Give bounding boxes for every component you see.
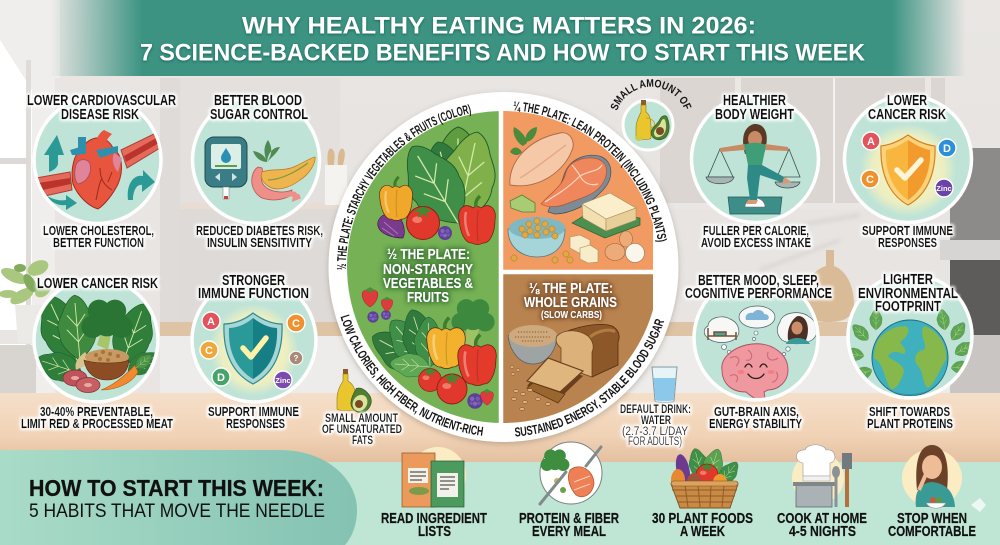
label: 30 PLANT FOODS	[652, 510, 753, 527]
icon: heart with arteries	[36, 130, 160, 210]
icon: orange shield with vitamins: C	[866, 174, 874, 186]
grains label: (SLOW CARBS)	[541, 309, 602, 321]
divider strokes	[501, 100, 665, 434]
caption: GUT-BRAIN AXIS,	[714, 405, 799, 419]
caption	[701, 224, 811, 250]
label	[777, 510, 867, 540]
heading: FOOTPRINT	[875, 299, 941, 315]
label	[519, 510, 619, 540]
ring text	[337, 101, 668, 436]
panel: lower cardiovascular disease risk	[27, 93, 176, 250]
heading: BETTER MOOD, SLEEP,	[698, 273, 819, 289]
caption: BETTER FUNCTION	[53, 236, 144, 250]
caption: INSULIN SENSITIVITY	[207, 236, 313, 250]
heading: LIGHTER	[883, 272, 933, 288]
callout: small amount of unsaturated fats	[322, 369, 402, 447]
panel: how to start this week	[0, 442, 1000, 545]
title	[140, 12, 866, 66]
label: PROTEIN & FIBER	[519, 510, 619, 527]
heading: BETTER BLOOD	[214, 93, 302, 109]
caption: SUPPORT IMMUNE	[862, 224, 953, 238]
caption: LOWER CHOLESTEROL,	[43, 224, 154, 238]
grains label	[524, 280, 617, 321]
label: DEFAULT DRINK:	[620, 404, 691, 416]
icon: greens, bowl, carrot and meat	[38, 294, 155, 393]
ring text: ½ THE PLATE: STARCHY VEGETABLES & FRUITS (COLOR)	[337, 104, 471, 270]
ring text: ¼ THE PLATE: LEAN PROTEIN (INCLUDING PLANTS)	[514, 101, 668, 242]
icon: teal shield with vitamins: Zinc	[275, 376, 291, 385]
half plate label: ½ THE PLATE:	[387, 246, 470, 263]
ring text: LOW CALORIES, HIGH FIBER, NUTRIENT-RICH	[340, 314, 484, 436]
caption: RESPONSES	[878, 236, 937, 250]
icon: oil bottle and avocado	[635, 100, 669, 141]
plate segments and foods	[340, 105, 653, 434]
icon: orange shield with vitamins: A	[867, 136, 875, 148]
label	[888, 510, 976, 540]
icon: teal shield with vitamins: A	[207, 316, 215, 328]
label: 4-5 NIGHTS	[789, 523, 856, 540]
heading	[685, 273, 832, 302]
label	[620, 404, 691, 448]
segment: quarter plate lean protein	[503, 105, 653, 270]
icon: earth with leaves	[851, 309, 970, 396]
icon: teal shield with vitamins	[200, 304, 305, 396]
label: READ INGREDIENT	[381, 510, 487, 527]
habit: protein and fiber every meal	[519, 442, 619, 540]
heading: SUGAR CONTROL	[210, 107, 308, 123]
title: 7 SCIENCE-BACKED BENEFITS AND HOW TO START THIS WEEK	[140, 40, 866, 66]
caption: ENERGY STABILITY	[709, 417, 803, 431]
caption: RESPONSES	[226, 417, 285, 431]
callout: small amount of oil (top)	[610, 79, 692, 152]
heading: LOWER CANCER RISK	[37, 276, 158, 292]
label: (2.7-3.7 L/DAY	[622, 426, 688, 438]
caption	[43, 224, 154, 250]
icon: orange shield with vitamins: Zinc	[936, 184, 952, 193]
icon: person balancing on scale	[706, 124, 800, 214]
caption	[709, 405, 803, 431]
heading	[715, 93, 794, 123]
label: EVERY MEAL	[532, 523, 606, 540]
panel: lighter environmental footprint	[842, 272, 976, 431]
habit: 30 plant foods a week	[652, 446, 753, 540]
caption	[196, 224, 323, 250]
heading: ENVIRONMENTAL	[858, 286, 958, 302]
icon: glass of water	[652, 367, 677, 402]
label: COOK AT HOME	[777, 510, 867, 527]
panel: stronger immune function	[192, 273, 316, 431]
heading: LOWER CARDIOVASCULAR	[27, 93, 176, 109]
icon: oil bottle and avocado	[337, 369, 376, 416]
label	[652, 510, 753, 540]
panel: better blood sugar control	[192, 93, 323, 250]
label: LISTS	[418, 523, 451, 540]
caption: AVOID EXCESS INTAKE	[701, 236, 811, 250]
label: FOR ADULTS)	[628, 436, 682, 448]
half plate label	[383, 246, 473, 306]
label: OF UNSATURATED	[322, 424, 402, 436]
banner text: HOW TO START THIS WEEK:	[29, 475, 324, 501]
icon: orange shield with vitamins: D	[943, 143, 951, 155]
icon: vegetable basket	[671, 446, 743, 508]
icon: glucose meter and pancreas	[205, 137, 315, 200]
label: A WEEK	[680, 523, 725, 540]
caption: LIMIT RED & PROCESSED MEAT	[21, 417, 173, 431]
icon: woman eating	[902, 445, 962, 508]
heading: DISEASE RISK	[61, 107, 139, 123]
segment: eighth plate whole grains	[503, 274, 653, 434]
panel: lower cancer risk (shield)	[844, 93, 972, 250]
caption: SUPPORT IMMUNE	[208, 405, 299, 419]
callout: default drink water	[620, 367, 691, 448]
icon: food packages	[402, 447, 466, 507]
header band	[50, 0, 975, 76]
habit: stop when comfortable	[888, 445, 976, 540]
grains label: WHOLE GRAINS	[524, 294, 617, 311]
icon: corner sparkle	[971, 498, 986, 512]
label	[322, 413, 402, 447]
heading: COGNITIVE PERFORMANCE	[685, 286, 832, 302]
icon: teal shield with vitamins: C	[292, 318, 300, 330]
heading: CANCER RISK	[868, 107, 946, 123]
caption	[21, 405, 173, 431]
heading: HEALTHIER	[723, 93, 786, 109]
caption: PLANT PROTEINS	[867, 417, 953, 431]
segment: half plate vegetables and fruits	[347, 111, 499, 423]
icon: teal shield with vitamins: D	[217, 372, 225, 384]
icon: teal shield with vitamins: ?	[294, 354, 299, 363]
icon: orange shield with vitamins	[860, 124, 956, 216]
title: WHY HEALTHY EATING MATTERS IN 2026:	[242, 12, 756, 40]
banner pill	[0, 450, 357, 545]
ring text: SUSTAINED ENERGY, STABLE BLOOD SUGAR	[514, 319, 664, 436]
half plate label: FRUITS	[407, 289, 449, 306]
banner text	[29, 475, 325, 522]
caption: 30-40% PREVENTABLE,	[40, 405, 153, 419]
half plate label: VEGETABLES &	[383, 275, 473, 292]
panel: central plate	[326, 92, 681, 446]
caption: FULLER PER CALORIE,	[703, 224, 809, 238]
icon: teal shield with vitamins: C	[205, 345, 213, 357]
label: WATER	[641, 415, 672, 427]
habit: read ingredient lists	[381, 447, 487, 540]
caption: SHIFT TOWARDS	[869, 405, 950, 419]
icon: brain and thought clouds	[704, 306, 817, 402]
panel: healthier body weight	[692, 93, 818, 250]
label: SMALL AMOUNT OF	[610, 79, 692, 110]
banner text: 5 HABITS THAT MOVE THE NEEDLE	[29, 501, 325, 522]
icon: plate with salmon and broccoli	[540, 442, 602, 504]
heading: IMMUNE FUNCTION	[198, 286, 309, 302]
grains label: ⅛ THE PLATE:	[529, 280, 613, 297]
label: SMALL AMOUNT	[325, 413, 398, 425]
heading: STRONGER	[222, 273, 285, 289]
label	[381, 510, 487, 540]
heading	[210, 93, 308, 123]
panel: lower cancer risk (foods)	[21, 276, 173, 431]
half plate label: NON-STARCHY	[383, 261, 473, 278]
caption	[208, 405, 299, 431]
caption	[862, 224, 953, 250]
icon: chef hat, pot and utensils	[792, 445, 852, 507]
label: FATS	[352, 435, 373, 447]
heading: BODY WEIGHT	[715, 107, 794, 123]
heading	[868, 93, 946, 123]
habit: cook at home 4-5 nights	[777, 445, 867, 540]
label: STOP WHEN	[897, 510, 967, 527]
panel: better mood, sleep, cognitive performance	[685, 273, 832, 431]
heading: LOWER	[887, 93, 927, 109]
heading	[27, 93, 176, 123]
caption	[867, 405, 953, 431]
heading	[198, 273, 309, 302]
heading	[858, 272, 958, 315]
caption: REDUCED DIABETES RISK,	[196, 224, 323, 238]
